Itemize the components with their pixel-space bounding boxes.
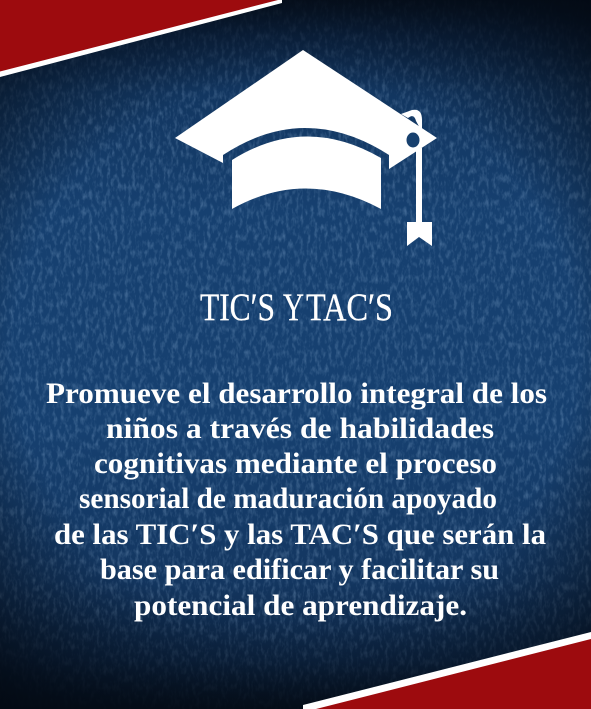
tassel hole: [406, 132, 420, 148]
title: Y: [283, 286, 304, 329]
description text block: potencial de aprendizaje.: [134, 589, 467, 622]
description text block: niños a través de habilidades: [106, 412, 494, 445]
description text block: cognitivas mediante el proceso: [94, 447, 497, 480]
title: [200, 286, 393, 329]
description text block: de las TIC′S y las TAC′S que serán la: [54, 518, 546, 551]
cap body: [232, 136, 381, 209]
icon: graduation cap: [175, 50, 437, 246]
title: TAC′S: [306, 286, 393, 329]
tassel end: [407, 222, 432, 246]
tassel cord and loop: [401, 110, 422, 222]
description text block: base para edificar y facilitar su: [100, 553, 499, 586]
title: TIC′S: [200, 286, 275, 329]
description text block: [46, 377, 547, 622]
description text block: sensorial de maduración apoyado: [79, 482, 497, 515]
bottom-right red corner banner: [303, 632, 591, 709]
top-left red corner banner: [0, 0, 282, 77]
description text block: Promueve el desarrollo integral de los: [46, 377, 547, 410]
mortarboard: [175, 50, 437, 169]
